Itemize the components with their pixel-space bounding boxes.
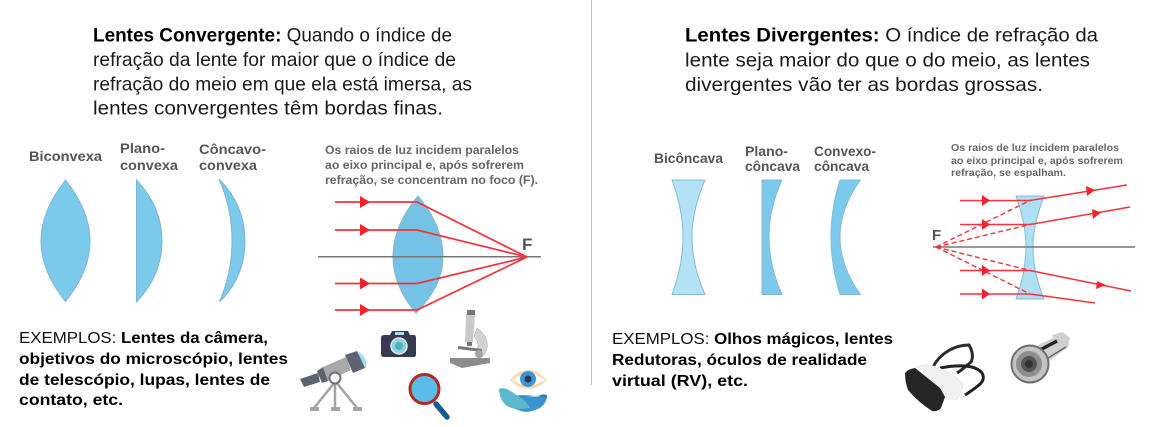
text: exemplos convergentes: objetivos do microscópio, lentes xyxy=(19,351,288,368)
lens: plano-convexa xyxy=(120,140,178,302)
dashed virtual rays xyxy=(936,200,1030,294)
red rays xyxy=(335,202,527,310)
panel: tipos de lentes convergentes xyxy=(29,140,266,302)
lens: plano-convexa: Plano- xyxy=(120,140,165,156)
icon: camera xyxy=(381,331,416,357)
lens: convexo-côncava xyxy=(814,143,876,294)
text: exemplos divergentes xyxy=(612,331,893,390)
lens: biconvexa xyxy=(29,148,102,302)
text: exemplos divergentes: virtual (RV), etc. xyxy=(612,373,748,390)
concave lens xyxy=(1016,196,1044,299)
heading: lentes divergentes: lente seja maior do que o do meio, as lentes xyxy=(685,50,1090,72)
text: exemplos divergentes: EXEMPLOS: Olhos mágicos, lentes xyxy=(612,331,893,348)
caption xyxy=(951,142,1123,179)
convex lens xyxy=(393,196,443,313)
caption xyxy=(325,145,538,187)
icon: VR headset xyxy=(905,345,983,411)
focus label: F xyxy=(522,235,532,254)
caption: Os raios de luz incidem paralelos xyxy=(325,145,519,157)
caption: ao eixo principal e, após sofrerem xyxy=(325,160,524,172)
text: exemplos convergentes: contato, etc. xyxy=(19,392,123,409)
lens: bicôncava xyxy=(654,150,723,294)
caption: Os raios de luz incidem paralelos xyxy=(951,142,1119,154)
heading: lentes convergentes: lentes convergentes têm bordas finas. xyxy=(93,98,443,120)
heading: lentes convergentes: refração da lente for maior que o índice de xyxy=(93,49,456,71)
ray arrows xyxy=(360,196,370,316)
icon: magnifying glass xyxy=(410,374,447,417)
caption: ao eixo principal e, após sofrerem xyxy=(951,155,1123,167)
lens: côncavo-convexa: Côncavo- xyxy=(199,141,266,157)
caption: refração, se concentram no foco (F). xyxy=(325,175,538,187)
icon: telescope xyxy=(300,351,366,411)
heading: lentes divergentes xyxy=(685,25,1098,96)
text: exemplos convergentes: EXEMPLOS: Lentes da câmera, xyxy=(19,330,268,347)
lens: plano-convexa: convexa xyxy=(120,157,178,173)
heading: lentes convergentes: refração do meio em que ela está imersa, as xyxy=(93,74,472,96)
icon: microscope xyxy=(450,310,490,368)
lens: plano-côncava: Plano- xyxy=(745,143,788,159)
heading: lentes divergentes: Lentes Divergentes: O índice de refração da xyxy=(685,25,1098,47)
lens: côncavo-convexa: convexa xyxy=(199,157,257,173)
red rays xyxy=(960,185,1131,303)
heading: lentes convergentes: Lentes Convergente: Quando o índice de xyxy=(93,24,452,46)
icon: door peephole xyxy=(1012,332,1070,382)
focus label: F xyxy=(932,227,941,244)
lens: convexo-côncava: côncava xyxy=(814,158,869,174)
lens: côncavo-convexa xyxy=(199,141,266,302)
lens: convexo-côncava: Convexo- xyxy=(814,143,876,159)
text: exemplos convergentes: de telescópio, lupas, lentes de xyxy=(19,372,270,389)
heading: lentes convergentes xyxy=(93,24,472,120)
lens: bicôncava: Bicôncava xyxy=(654,150,723,166)
lens: biconvexa: Biconvexa xyxy=(29,148,102,164)
chart: raios divergentes xyxy=(932,142,1135,303)
caption: refração, se espalham. xyxy=(951,167,1066,179)
panel: tipos de lentes divergentes xyxy=(654,143,876,294)
icon: eye and contact lens xyxy=(499,370,547,412)
ray arrows xyxy=(982,186,1106,300)
text: exemplos divergentes: Redutoras, óculos de realidade xyxy=(612,352,867,369)
chart: raios convergentes xyxy=(318,145,541,316)
lens: plano-côncava: côncava xyxy=(745,158,800,174)
lens: plano-côncava xyxy=(745,143,800,294)
heading: lentes divergentes: divergentes vão ter as bordas grossas. xyxy=(685,74,1043,96)
text: exemplos convergentes xyxy=(19,330,288,409)
